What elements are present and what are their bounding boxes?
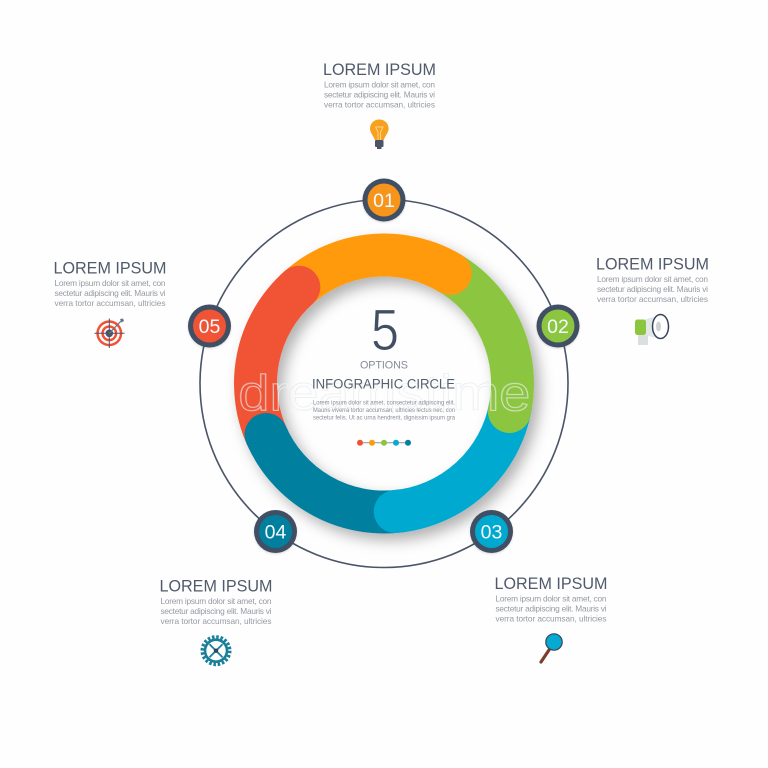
centre paragraph: Lorem ipsum dolor sit amet, consectetur adipiscing elit.: [313, 400, 455, 406]
centre paragraph: [313, 400, 455, 422]
outer thin circle: [200, 200, 568, 568]
text block 03: verra tortor accumsan, ultricies: [496, 614, 606, 624]
centre paragraph: Mauris viverra tortor accumsan, ultricies lectus nec, con: [313, 407, 455, 414]
text block 01: [323, 60, 436, 110]
icon: light bulb: [370, 120, 389, 149]
text block 03: [494, 574, 608, 624]
text block 02: [596, 254, 709, 304]
text block 05: [54, 258, 166, 308]
text block 05: Lorem ipsum dolor sit amet, con: [54, 278, 166, 288]
node 03: 03: [481, 521, 502, 543]
node 04: [254, 510, 297, 553]
text block 04: verra tortor accumsan, ultricies: [160, 616, 272, 626]
node 02: 02: [547, 316, 569, 338]
big number 5: 5: [371, 298, 399, 363]
node 03: [470, 510, 513, 553]
text block 02: Lorem ipsum dolor sit amet, con: [597, 274, 708, 284]
text block 05: sectetur adipiscing elit. Mauris vi: [54, 288, 166, 298]
text block 01: LOREM IPSUM: [323, 60, 436, 79]
text block 04: [160, 576, 272, 626]
icon: gear: [202, 637, 230, 664]
text block 01: verra tortor accumsan, ultricies: [324, 100, 435, 110]
text block 01: sectetur adipiscing elit. Mauris vi: [324, 90, 435, 100]
text block 03: sectetur adipiscing elit. Mauris vi: [496, 604, 607, 614]
centre paragraph: sectetur felis. Ut ac urna hendrerit, dignissim ipsum gra: [313, 414, 455, 422]
node 05: 05: [199, 316, 220, 338]
text block 03: Lorem ipsum dolor sit amet, con: [496, 594, 607, 604]
centre text block: [312, 298, 455, 422]
text block 01: Lorem ipsum dolor sit amet, con: [324, 80, 435, 90]
text block 04: LOREM IPSUM: [160, 576, 272, 596]
options label: OPTIONS: [360, 360, 408, 372]
infographic circle heading: INFOGRAPHIC CIRCLE: [312, 376, 455, 392]
text block 05: verra tortor accumsan, ultricies: [54, 298, 166, 308]
dot timeline: [357, 440, 411, 446]
node 01: 01: [373, 190, 395, 212]
text block 02: sectetur adipiscing elit. Mauris vi: [597, 284, 708, 294]
node 05: [188, 304, 231, 348]
segmented colour ring: [255, 255, 513, 512]
node 04: 04: [265, 521, 286, 543]
watermark: dreamstime: [238, 366, 530, 422]
text block 05: LOREM IPSUM: [54, 258, 166, 278]
icon: megaphone: [635, 314, 668, 345]
node 01: [362, 178, 406, 222]
watermark: dreamstime: [238, 365, 530, 421]
text block 04: sectetur adipiscing elit. Mauris vi: [160, 606, 272, 616]
text block 03: LOREM IPSUM: [494, 574, 608, 593]
text block 02: LOREM IPSUM: [596, 254, 709, 274]
text block 04: Lorem ipsum dolor sit amet, con: [160, 596, 272, 606]
node 02: [536, 304, 580, 348]
icon: target: [94, 318, 124, 348]
text block 02: verra tortor accumsan, ultricies: [597, 294, 708, 304]
icon: magnifier: [541, 634, 562, 662]
